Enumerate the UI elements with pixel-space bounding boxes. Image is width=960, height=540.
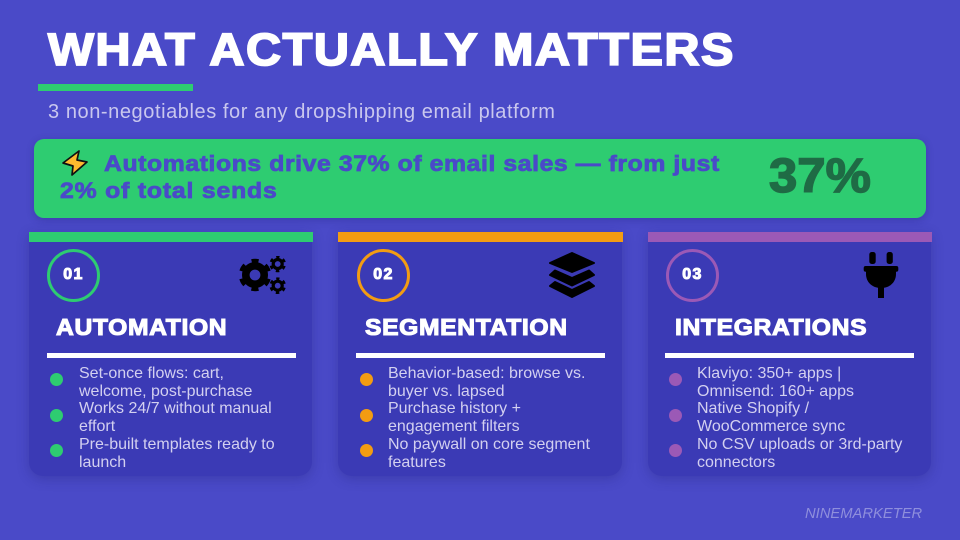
divider <box>47 353 296 358</box>
panel: key stat banner <box>34 139 926 218</box>
subtitle: 3 non-negotiables for any dropshipping email platform <box>48 101 555 123</box>
divider <box>356 353 605 358</box>
banner message: Automations drive 37% of email sales — from just <box>104 151 720 176</box>
heading: AUTOMATION <box>56 314 227 340</box>
green top bar <box>29 232 313 242</box>
divider <box>665 353 914 358</box>
bullet dot 2 <box>668 408 682 422</box>
bullet dot 1 <box>50 373 63 386</box>
number badge 02 <box>357 249 410 302</box>
bullet text 3: features <box>388 454 446 471</box>
bullet list <box>360 365 590 471</box>
bullet list <box>50 365 275 471</box>
icon: layers <box>549 252 595 298</box>
title: WHAT ACTUALLY MATTERS <box>48 24 735 75</box>
panel: segmentation <box>338 232 622 476</box>
banner message: 2% of total sends <box>60 178 278 203</box>
bullet dot 2 <box>50 408 63 422</box>
bullet text 2: Native Shopify / <box>697 400 809 417</box>
bullet text 1: welcome, post-purchase <box>79 383 252 400</box>
heading: SEGMENTATION <box>365 314 568 340</box>
bullet dot 2 <box>360 408 372 422</box>
big stat number: 37% <box>769 150 871 203</box>
bullet text 1 <box>79 365 252 400</box>
bullet text 1 <box>388 365 585 400</box>
number badge 03 <box>666 249 719 302</box>
title accent bar <box>38 84 193 91</box>
bullet text 2 <box>388 400 521 435</box>
bullet text 1: Set-once flows: cart, <box>79 365 224 382</box>
bullet text 2: effort <box>79 418 115 435</box>
bullet dot 1 <box>360 373 372 386</box>
bullet dot 3 <box>50 444 63 457</box>
icon: plug <box>864 252 898 298</box>
icon: gears <box>239 256 286 294</box>
bullet text 3: launch <box>79 454 126 471</box>
bullet dot 3 <box>668 444 682 457</box>
bullet text 2 <box>79 400 272 435</box>
icon: lightning bolt <box>62 150 88 176</box>
panel: automation <box>29 232 312 476</box>
purple top bar <box>648 232 932 242</box>
bullet dot 1 <box>668 373 682 386</box>
bullet text 2: engagement filters <box>388 418 520 435</box>
bullet text 2: Purchase history + <box>388 400 521 417</box>
bullet text 3 <box>697 436 902 471</box>
bullet text 1: Behavior-based: browse vs. <box>388 365 585 382</box>
bullet text 3: Pre-built templates ready to <box>79 436 275 453</box>
number badge 03: 03 <box>682 266 703 283</box>
bullet text 3: No paywall on core segment <box>388 436 590 453</box>
bullet text 2: WooCommerce sync <box>697 418 845 435</box>
bullet text 3 <box>79 436 275 471</box>
bullet text 1: Klaviyo: 350+ apps | <box>697 365 841 382</box>
bullet text 1 <box>697 365 854 400</box>
bullet text 3: No CSV uploads or 3rd-party <box>697 436 902 453</box>
bullet text 2: Works 24/7 without manual <box>79 400 272 417</box>
heading: INTEGRATIONS <box>675 314 867 340</box>
bullet text 3: connectors <box>697 454 775 471</box>
bullet text 1: buyer vs. lapsed <box>388 383 505 400</box>
bullet list <box>669 365 902 471</box>
bullet text 2 <box>697 400 845 435</box>
bullet text 3 <box>388 436 590 471</box>
number badge 02: 02 <box>373 266 394 283</box>
bullet dot 3 <box>360 444 372 457</box>
panel: integrations <box>648 232 931 476</box>
bullet text 1: Omnisend: 160+ apps <box>697 383 854 400</box>
orange top bar <box>338 232 623 242</box>
banner message <box>60 151 720 203</box>
number badge 01: 01 <box>63 266 84 283</box>
footer brand: NINEMARKETER <box>805 506 922 522</box>
number badge 01 <box>47 249 100 302</box>
